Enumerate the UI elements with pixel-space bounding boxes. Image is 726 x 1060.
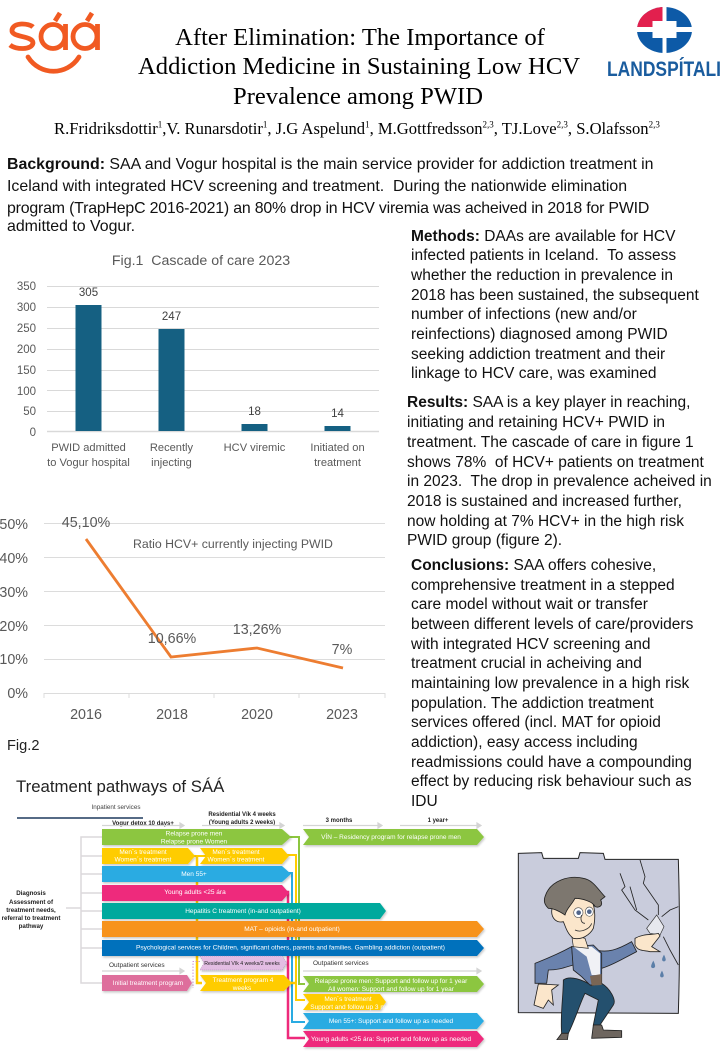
line chart: ratio HCV+: 45,10% [62,515,111,531]
bar labels: Initial treatment program [113,980,183,987]
line chart: ratio HCV+: 13,26% [233,622,282,638]
text: methods: whether the reduction in prevalence in [411,267,673,284]
flowchart: treatment pathways: 1 year+ [428,818,449,824]
line chart: ratio HCV+: 20% [0,619,28,635]
text: methods: infected patients in Iceland. To assess [411,247,676,264]
left sleeve [535,947,573,983]
flowchart: treatment pathways: Vogur detox 10 days+ [112,821,174,827]
text: conclusions: addiction), easy access including [411,734,638,751]
text: methods: 2018 has been sustained, the subsequent [411,287,699,304]
neck [572,935,588,948]
bar chart: cascade of care [17,253,379,469]
logo: SAA [8,12,100,74]
title: After Elimination: The Importance of [175,24,545,51]
flowchart: treatment pathways [2,804,486,1050]
flowchart: treatment pathways: Inpatient services [91,804,141,811]
text: results: in 2023. The drop in prevalence acheived in [407,473,712,490]
line chart: ratio HCV+: 2016 [70,707,102,723]
bar labels: Psychological services for Children, significant others, parents and families. Gambling addiction (outpatient) [136,944,445,952]
text: background: Iceland with integrated HCV screening and treatment. During the nationwide elimination [7,178,627,195]
hair [544,877,605,915]
bar chart: cascade of care: HCV viremic [224,442,286,454]
line chart: ratio HCV+: Ratio HCV+ currently injecting PWID [133,537,333,551]
bar chart: cascade of care: 305 [79,287,98,299]
text: background [7,156,654,235]
text: results: PWID group (figure 2). [407,532,562,549]
bar chart: cascade of care: 247 [162,311,181,323]
flowchart: treatment pathways: Assessment of [9,899,54,906]
line chart: ratio HCV+: 30% [0,585,28,601]
text: results: Results: SAA is a key player in reaching, [407,394,690,411]
bar labels: VÍN – Residency program for relapse prone men [321,832,461,841]
text: conclusions: comprehensive treatment in a stepped [411,577,675,594]
text: results: initiating and retaining HCV+ PWID in [407,414,665,431]
bar labels: Hepatitis C treatment (in-and outpatient) [185,908,301,915]
bar labels: Men´s treatment [212,849,260,856]
title [138,24,580,110]
text: methods: seeking addiction treatment and their [411,346,665,363]
eyes [574,907,593,918]
text: results: now holding at 7% HCV+ in the high risk [407,513,684,530]
bar labels: Women´s treatment [115,856,172,864]
flowchart: treatment pathways: referral to treatment [2,915,60,922]
text: conclusions: care model without wait or transfer [411,596,648,613]
line chart: ratio HCV+: 7% [332,642,353,658]
line chart: ratio HCV+: 2018 [156,707,188,723]
bar labels: Support and follow up 3 m [310,1004,386,1011]
left hand [534,984,558,1008]
text: conclusions: with integrated HCV screening and [411,636,651,653]
bar labels: All women: Support and follow up for 1 year [328,986,455,993]
text: conclusions: between different levels of care/providers [411,616,693,633]
bar labels: Relapse prone Women [161,838,228,846]
bar chart: cascade of care: 0 [30,427,36,439]
text: background: program (TrapHepC 2016-2021) an 80% drop in HCV viremia was acheived in 2018 for PWID [7,200,649,217]
line chart: ratio HCV+: 50% [0,517,28,533]
text: results: 2018 is sustained and increased further, [407,493,682,510]
text: conclusions: Conclusions: SAA offers cohesive, [411,557,656,574]
bar chart: cascade of care: 100 [17,386,36,398]
bar labels: Residential Vík 4 weeks/2 weeks [204,961,280,967]
heading: treatment pathways: Treatment pathways of SÁÁ [16,777,224,796]
bar chart: cascade of care: 150 [17,365,36,377]
line chart: ratio HCV+: 40% [0,551,28,567]
bar labels: Relapse prone men: Support and follow up for 1 year [315,978,468,985]
line chart: ratio HCV+: 2023 [326,707,358,723]
chart title: Fig.1 Cascade of care 2023 [112,253,290,269]
text: results: shows 78% of HCV+ patients on treatment [407,454,704,471]
text: conclusions: population. The addiction treatment [411,695,654,712]
line chart: ratio HCV+: 10% [0,652,28,668]
legs [561,978,614,1033]
flowchart: treatment pathways: Outpatient services [109,962,165,969]
logo: Landspitali [607,7,721,81]
head [552,894,595,939]
bar chart: cascade of care: 50 [23,406,36,418]
flowchart: treatment pathways: Residential Vík 4 weeks [208,812,276,818]
text: conclusions: services offered (incl. MAT for opioid [411,714,661,731]
water drops [651,955,666,977]
bar labels: Women´s treatment [208,856,265,864]
flowchart: treatment pathways: Outpatient services [313,960,369,967]
bar chart: cascade of care: Recently [150,442,194,454]
bar chart: cascade of care: treatment [314,457,361,469]
connectors [197,837,305,1038]
bar labels: Men 55+ [181,871,207,878]
wall [518,853,680,1013]
text: background: Background: SAA and Vogur hospital is the main service provider for addiction treatment in [7,156,654,173]
bar chart: cascade of care: 18 [248,406,261,418]
line chart: ratio HCV+: 0% [7,686,28,702]
torso [572,945,602,985]
bar labels: Treatment program 4 [213,977,274,984]
bar chart: cascade of care: injecting [151,457,192,469]
text: methods: Methods: DAAs are available for HCV [411,228,675,245]
bar chart: cascade of care: 250 [17,323,36,335]
text: methods: linkage to HCV care, was examined [411,365,657,382]
bar labels [113,830,471,1043]
nose and mouth [575,915,592,931]
bar chart: cascade of care: 350 [17,281,36,293]
bar chart: cascade of care: to Vogur hospital [47,457,130,469]
bar chart: cascade of care: 14 [331,408,344,420]
text: conclusions: effect by reducing risk behaviour such as [411,773,692,790]
bar labels: Young adults <25 ára: Support and follow up as needed [311,1036,471,1043]
text: methods [411,228,699,382]
text: results [407,394,712,549]
bar labels: MAT – opioids (in-and outpatient) [244,926,340,933]
bar labels: weeks [232,985,252,992]
bars [102,829,484,1047]
bar labels: Men 55+: Support and follow up as needed [329,1018,453,1025]
bar labels: Men´s treatment [324,996,372,1003]
text: results: treatment. The cascade of care in figure 1 [407,434,694,451]
text: conclusions: IDU [411,793,438,810]
text: conclusions [411,557,693,810]
text: conclusions: maintaining low prevalence in a high risk [411,675,689,692]
bar labels: Young adults <25 ára [164,889,226,896]
bar chart: cascade of care: 200 [17,344,36,356]
caption: Fig.2: Fig.2 [7,738,39,754]
line chart: ratio HCV+ [0,515,386,723]
line chart: ratio HCV+: 10,66% [148,631,197,647]
text: conclusions: readmissions could have a compounding [411,754,692,771]
bar labels: Men´s treatment [119,849,167,856]
flowchart: treatment pathways: pathway [19,923,44,930]
text: conclusions: treatment crucial in acheiving and [411,655,642,672]
title: Addiction Medicine in Sustaining Low HCV [138,53,580,80]
right arm [592,942,637,968]
bar chart: cascade of care: Initiated on [310,442,365,454]
illustration: man plugging a leak [518,852,680,1040]
line chart: ratio HCV+: 2020 [241,707,273,723]
text: background: admitted to Vogur. [7,218,135,235]
authors: R.Fridriksdottir1,V. Runarsdotir1, J.G Aspelund1, M.Gottfredsson2,3, TJ.Love2,3, S.Olafsson2,3 [54,119,660,138]
bar chart: cascade of care: 300 [17,302,36,314]
shoes [557,1025,622,1040]
title: Prevalence among PWID [233,83,483,110]
cracks [620,860,678,965]
flowchart: treatment pathways: treatment needs, [6,907,56,914]
bar chart: cascade of care: PWID admitted [51,442,126,454]
flowchart: treatment pathways: (Young adults 2 weeks) [209,820,275,826]
flowchart: treatment pathways: Diagnosis [16,890,46,897]
flowchart: treatment pathways: 3 months [326,818,353,824]
text: methods: reinfections) diagnosed among PWID [411,326,668,343]
bar labels: Relapse prone men [166,830,223,838]
text: methods: number of infections (new and/or [411,306,637,323]
